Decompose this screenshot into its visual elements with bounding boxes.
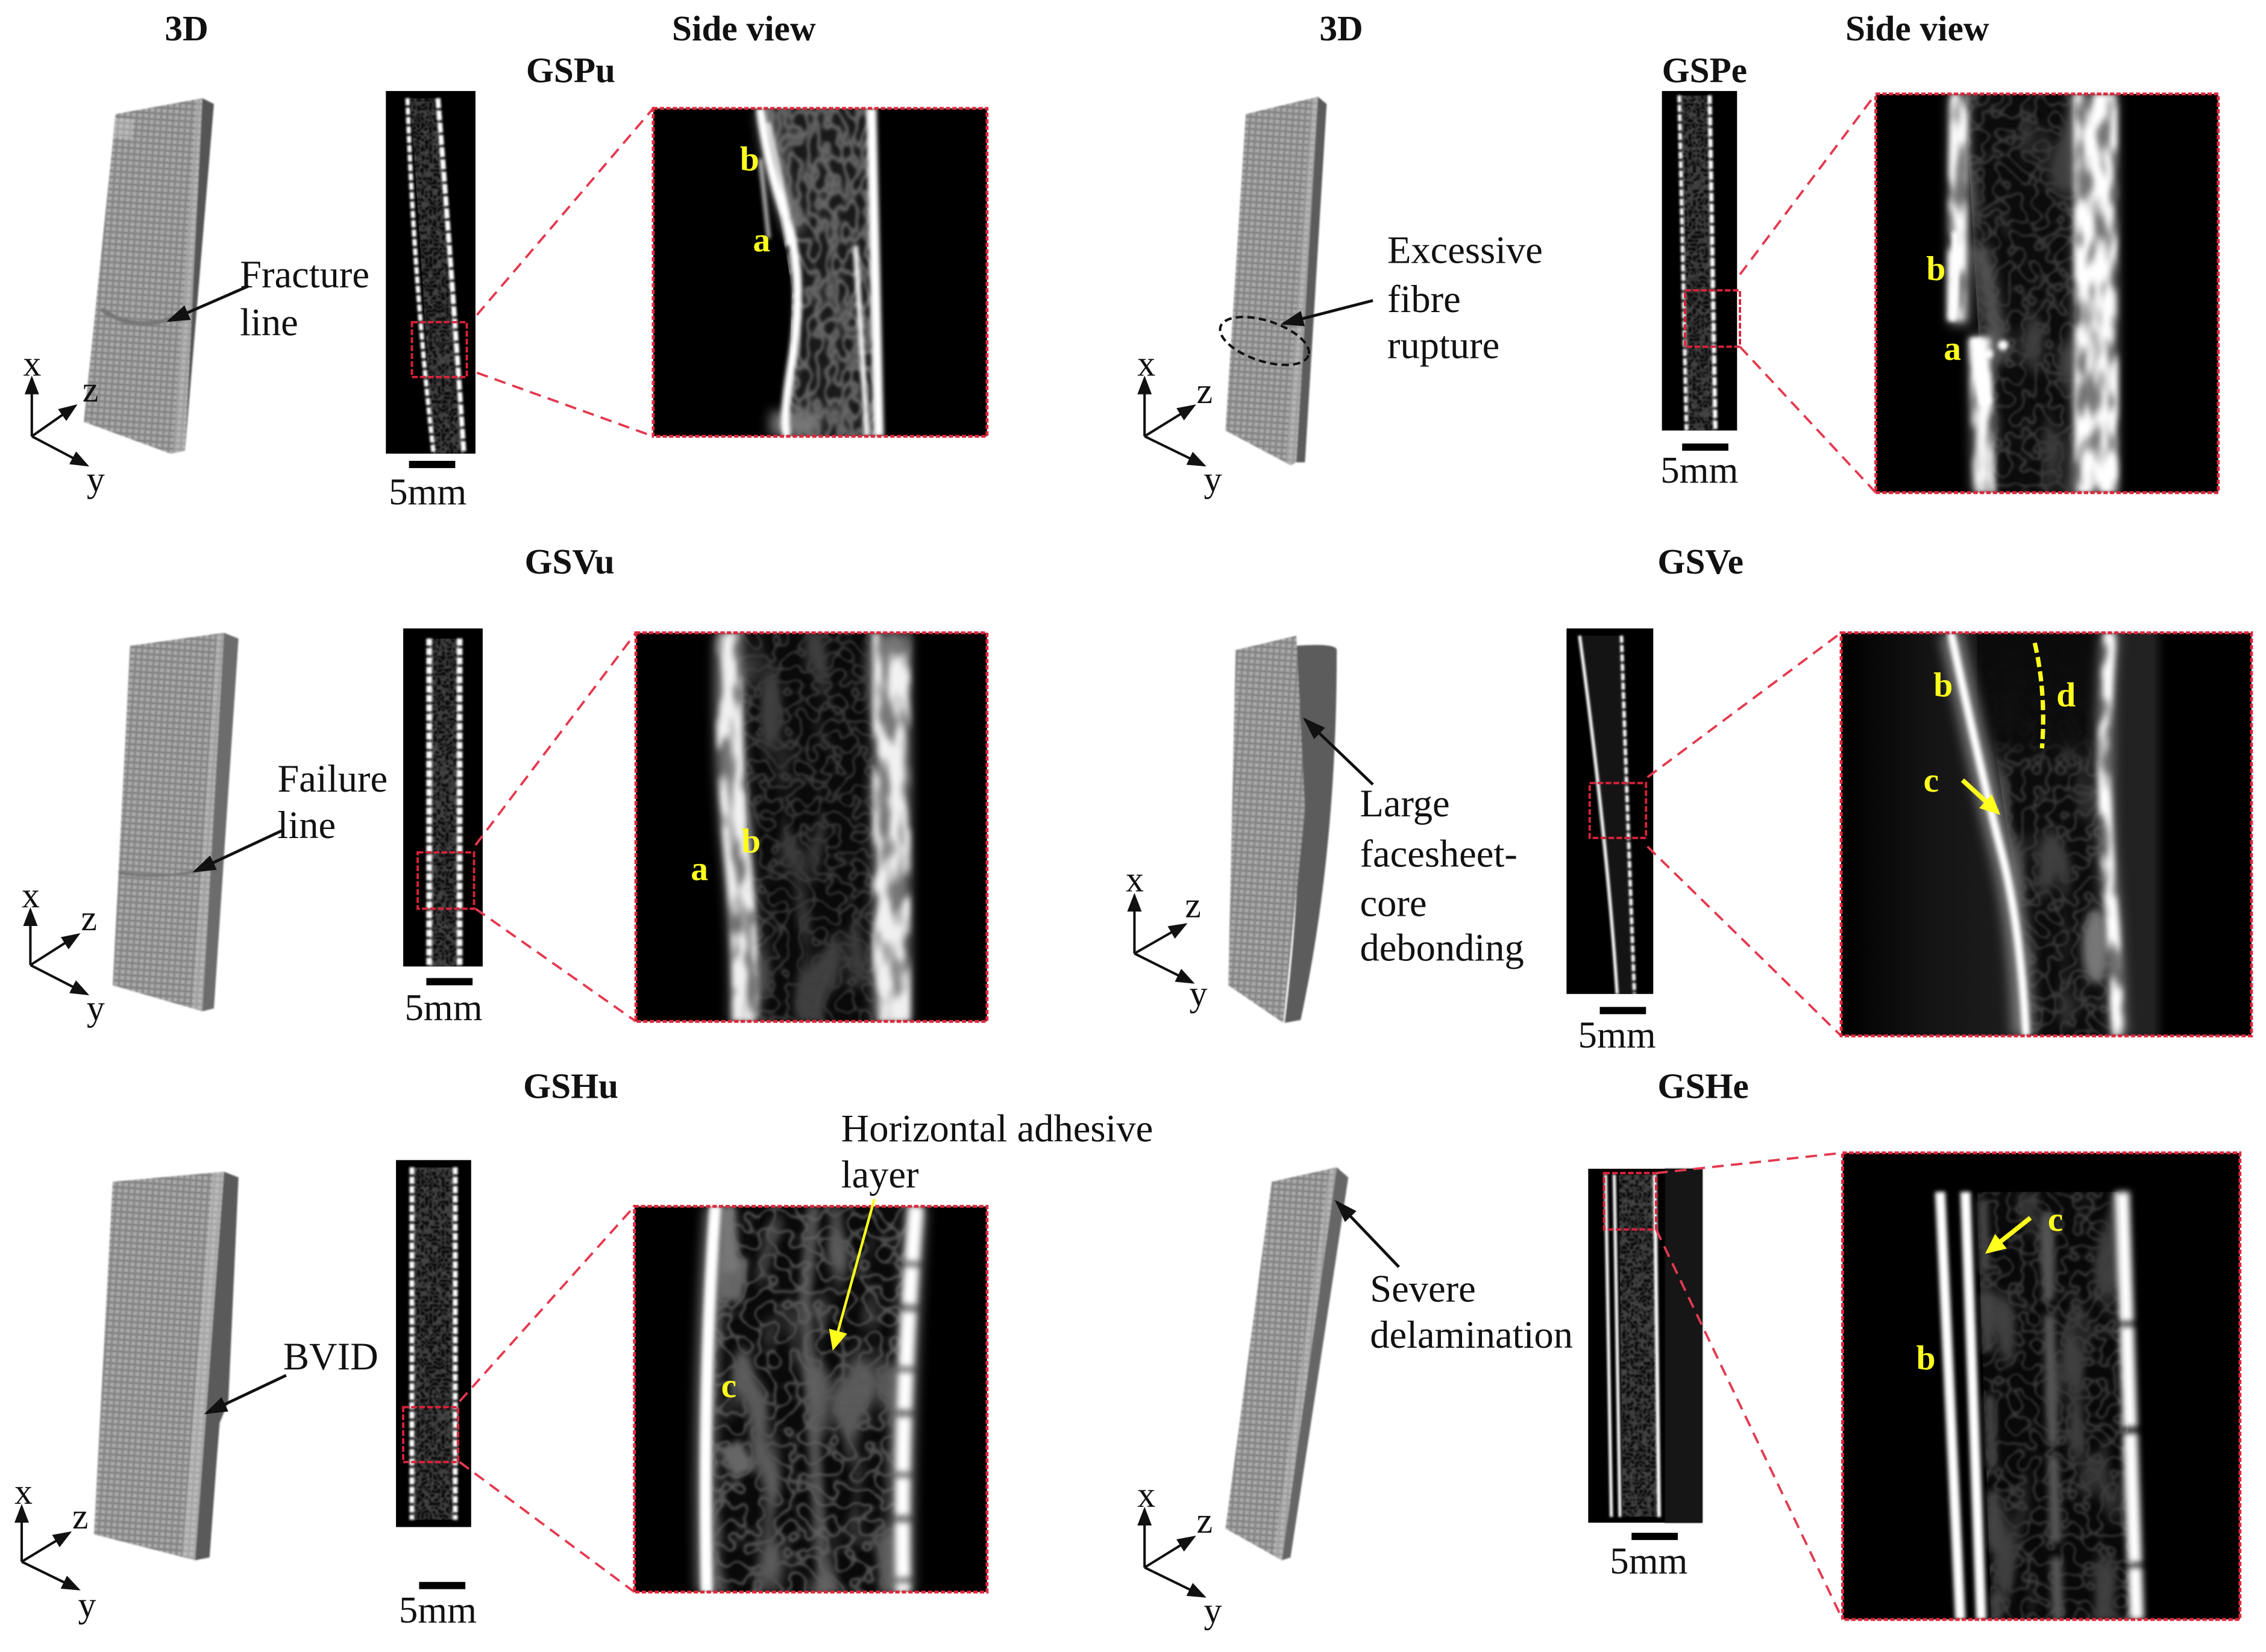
annotation: fibre rupture (1214, 228, 1543, 375)
zoomed CT GSVu (636, 633, 987, 1021)
CT strip GSHu (396, 1160, 471, 1527)
zoom frame (1876, 94, 2218, 493)
axes: x (23, 343, 41, 383)
scale bar 5mm: 5mm (1578, 1013, 1656, 1056)
annotation: facesheet-core debonding: core (1360, 881, 1426, 924)
annotation: severe delamination (1337, 1202, 1573, 1356)
panel: GSHe (1137, 1066, 2240, 1630)
damage labels: a (691, 849, 708, 887)
label: GSPe: GSPe (1662, 51, 1747, 90)
annotation: BVID (207, 1335, 378, 1413)
3D specimen GSPe (1225, 97, 1326, 465)
zoom frame (635, 1206, 987, 1592)
damage labels: a (753, 221, 770, 259)
annotation: fibre rupture: fibre (1387, 278, 1461, 321)
damage labels (1926, 250, 1961, 368)
damage labels: b (741, 822, 761, 860)
region of interest (403, 1407, 458, 1462)
label: GSPu: GSPu (526, 51, 615, 90)
annotation: fracture line (169, 253, 369, 343)
axes: x (1137, 343, 1155, 383)
label: GSHu: GSHu (523, 1066, 618, 1106)
zoomed CT GSHu (635, 1206, 987, 1592)
3D specimen GSVe (1228, 636, 1337, 1023)
scale bar 5mm: 5mm (1660, 449, 1738, 491)
annotation: facesheet-core debonding: facesheet- (1360, 833, 1517, 875)
damage labels: b (740, 140, 759, 178)
scale bar 5mm: 5mm (1610, 1539, 1687, 1582)
axes: y (1190, 974, 1208, 1013)
scale bar 5mm: 5mm (389, 471, 466, 513)
zoom connectors (1656, 1153, 1842, 1619)
annotation: facesheet-core debonding: Large (1360, 782, 1450, 825)
panel: GSHu (14, 1066, 1153, 1631)
annotation: fracture line: line (240, 301, 298, 343)
scale bar 5mm: 5mm (404, 986, 483, 1028)
damage labels: a (1944, 330, 1961, 368)
annotation: fibre rupture: rupture (1387, 324, 1499, 367)
CT strip GSVu (403, 628, 483, 966)
3D specimen GSVu (113, 633, 239, 1012)
damage labels and arrows: c (1924, 762, 1939, 799)
region of interest (1604, 1173, 1656, 1230)
axes: y (1204, 1591, 1222, 1630)
panel: GSVe (1126, 542, 2252, 1056)
CT strip GSPu (386, 91, 475, 454)
annotation: horizontal adhesive layer: layer (841, 1153, 919, 1196)
axes (22, 875, 105, 1028)
region of interest (1590, 783, 1646, 838)
panel: GSPu (23, 51, 987, 513)
label: GSVe: GSVe (1657, 542, 1743, 581)
annotation: fibre rupture: Excessive (1387, 228, 1543, 271)
annotation: severe delamination: Severe (1370, 1268, 1476, 1310)
heading: side view right column: Side view (1845, 8, 1989, 48)
region of interest (418, 853, 474, 909)
annotation: facesheet-core debonding: debonding (1360, 927, 1524, 969)
3D specimen GSHu (94, 1172, 239, 1560)
damage labels and arrows: b (1933, 666, 1953, 704)
zoom frame (653, 108, 987, 436)
annotation: facesheet-core debonding (1305, 719, 1524, 969)
zoom connectors (475, 633, 636, 1021)
damage labels and arrows (1924, 643, 2076, 812)
axes: z (81, 898, 97, 938)
axes: z (1197, 1501, 1213, 1541)
zoom connectors (1740, 94, 1876, 493)
axes: y (78, 1585, 96, 1624)
region of interest (1685, 290, 1740, 346)
damage labels and arrow: b (1916, 1339, 1936, 1377)
axes: z (1197, 371, 1213, 411)
region of interest (412, 322, 467, 377)
damage labels (691, 822, 761, 887)
panel: GSPe (1137, 51, 2218, 499)
damage labels: b (1926, 250, 1945, 288)
axes (1137, 1475, 1222, 1630)
3D specimen GSHe (1225, 1168, 1348, 1560)
axes: x (1126, 860, 1144, 900)
CT strip GSVe (1566, 628, 1653, 994)
annotation: failure line: line (277, 804, 336, 846)
annotation: horizontal adhesive layer: Horizontal adhesive (841, 1107, 1153, 1150)
zoom connectors (460, 1206, 635, 1592)
damage labels and arrows: d (2056, 677, 2076, 715)
zoom frame (1842, 1153, 2240, 1619)
CT strip GSHe (1588, 1169, 1703, 1522)
zoomed CT GSPu (653, 108, 987, 436)
annotation: severe delamination: delamination (1370, 1313, 1573, 1356)
axes (1137, 343, 1222, 499)
damage labels and arrow: c (2048, 1201, 2063, 1239)
zoom connectors (477, 108, 653, 436)
label: GSHe: GSHe (1657, 1066, 1749, 1106)
heading: 3D right column: 3D (1319, 8, 1363, 48)
axes (23, 343, 105, 499)
axes: y (1204, 459, 1222, 499)
heading: 3D left column: 3D (165, 8, 209, 48)
axes: x (22, 875, 40, 915)
damage label c: c (721, 1367, 736, 1405)
axes: z (72, 1497, 89, 1536)
axes: z (83, 370, 98, 410)
label: GSVu: GSVu (524, 542, 615, 581)
annotation: BVID: BVID (283, 1335, 378, 1378)
axes (1126, 860, 1208, 1013)
damage labels (740, 140, 770, 259)
CT strip GSPe (1662, 91, 1737, 431)
axes: y (87, 459, 105, 499)
axes: x (14, 1472, 33, 1512)
scale bar 5mm: 5mm (399, 1589, 477, 1631)
damage labels and arrow (1916, 1201, 2063, 1377)
panel: GSVu (22, 542, 987, 1028)
zoomed CT GSVe (1841, 633, 2252, 1036)
axes: y (87, 988, 105, 1028)
annotation: horizontal adhesive layer (834, 1107, 1153, 1347)
zoomed CT GSHe (1842, 1153, 2240, 1619)
zoomed CT GSPe (1876, 94, 2218, 493)
zoom connectors (1648, 633, 1841, 1036)
zoom frame (636, 633, 987, 1021)
axes: z (1185, 886, 1201, 925)
annotation: failure line: Failure (277, 757, 388, 800)
3D specimen GSPu (84, 98, 214, 454)
axes (14, 1472, 96, 1624)
heading: side view left column: Side view (672, 8, 816, 48)
zoom frame (1841, 633, 2252, 1036)
annotation: fracture line: Fracture (240, 253, 369, 296)
annotation: failure line (195, 757, 388, 871)
axes: x (1137, 1475, 1155, 1515)
